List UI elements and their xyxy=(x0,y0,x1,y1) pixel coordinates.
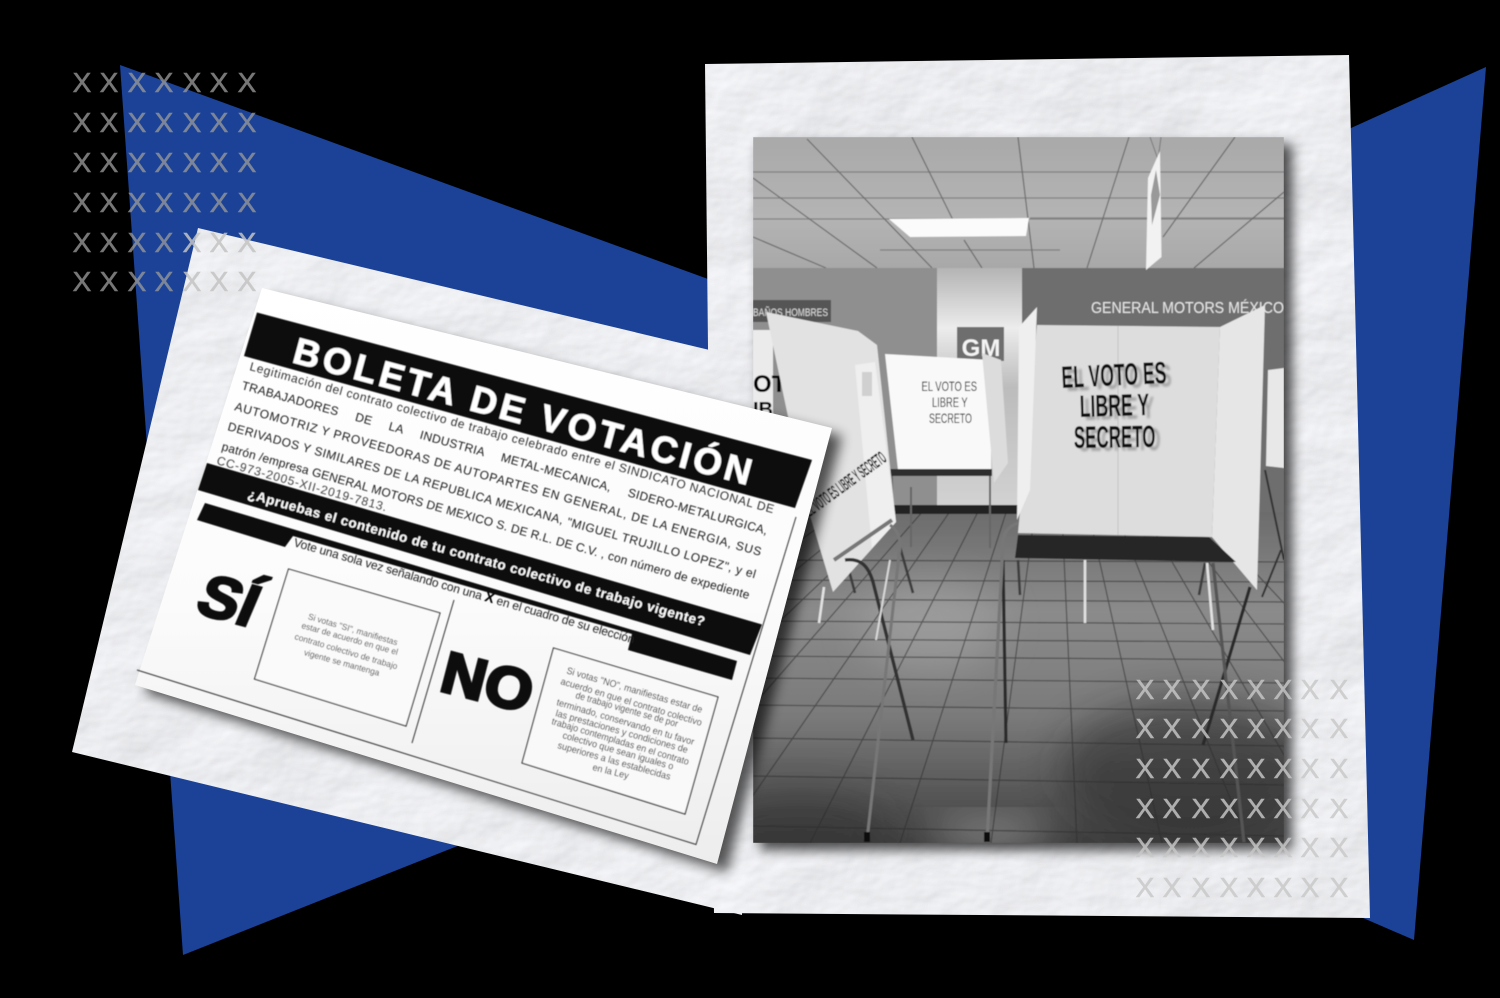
pattern: X grid top left over paper: XXX xyxy=(183,227,257,258)
pattern: X grid top left on dark: XXXXXXX xyxy=(73,67,257,98)
ceiling xyxy=(753,137,1284,269)
ballot instruction bar xyxy=(197,503,737,680)
booth legs: left xyxy=(834,520,913,840)
column with GM logo xyxy=(937,268,1022,508)
ballot frame lines xyxy=(137,517,796,844)
booth text: center: LIBRE Y xyxy=(932,394,968,410)
ballot title: BOLETA DE VOTACIÓN xyxy=(289,329,757,493)
NO label: NO xyxy=(435,640,540,726)
ballot question bar xyxy=(198,463,762,655)
pattern: X grid bottom right: XXXXXXXX xyxy=(1136,713,1349,744)
photo shadow xyxy=(760,144,1292,850)
SÍ explanation: vigente se mantenga xyxy=(303,647,381,678)
ballot legal text: CC-973-2005-XII-2019-7813. xyxy=(215,453,388,514)
booth: center xyxy=(885,353,1008,483)
ballot legal text: patrón /empresa GENERAL MOTORS DE MEXICO S. DE R.L. DE C.V. , con número de expediente xyxy=(220,439,752,602)
sign: baños hombres xyxy=(753,300,831,322)
pattern: X grid top left over paper xyxy=(183,227,257,297)
floor with tiles xyxy=(753,513,1284,843)
pattern: X grid top left over paper: XXX xyxy=(183,266,257,297)
pattern: X grid top left on dark: XXXXXXX xyxy=(73,147,257,178)
booth legs: right xyxy=(864,560,1252,842)
booth legs: background xyxy=(847,470,1205,595)
pattern: X grid bottom right: XXXXXXXX xyxy=(1136,872,1349,903)
pattern: X grid bottom right xyxy=(1136,674,1349,903)
ballot legal text: DERIVADOS Y SIMILARES DE LA REPUBLICA MEXICANA, "MIGUEL TRUJILLO LOPEZ", y el xyxy=(226,419,758,581)
booth text: right large: SECRETO xyxy=(1074,419,1156,455)
ballot legal text: AUTOMOTRIZ Y PROVEEDORAS DE AUTOPARTES EN GENERAL, DE LA ENERGIA, SUS xyxy=(233,399,763,559)
NO explanation: en la Ley xyxy=(591,762,630,782)
photo: polling booths at General Motors xyxy=(753,137,1284,843)
booth: left xyxy=(766,312,896,592)
booth: far left edge xyxy=(753,329,782,414)
blue shape: left xyxy=(120,65,730,955)
wall right xyxy=(1022,268,1284,518)
booth: far right edge xyxy=(1262,368,1284,597)
SÍ explanation: contrato colectivo de trabajo xyxy=(293,631,399,671)
ballot legal text: Legitimación del contrato colectivo de trabajo celebrado entre el SINDICATO NACIONAL DE xyxy=(248,359,776,516)
pattern: X grid top left on dark: XXXX xyxy=(73,227,174,258)
pattern: X grid top left on dark: XXXX xyxy=(73,266,174,297)
ballot legal text: TRABAJADORES DE LA INDUSTRIA METAL-MECANICA, SIDERO-METALURGICA, xyxy=(240,378,769,538)
booth text: center: SECRETO xyxy=(929,410,972,426)
SÍ box xyxy=(254,569,440,726)
SÍ explanation: Si votas "SI", manifiestas xyxy=(307,611,400,648)
paper: left crumpled sheet xyxy=(72,228,760,915)
pattern: X grid top left on dark xyxy=(73,67,257,297)
SÍ explanation xyxy=(293,611,400,678)
ballot title bar xyxy=(244,312,812,508)
blue shape: right xyxy=(1340,67,1486,940)
pattern: X grid top left on dark: XXXXXXX xyxy=(73,187,257,218)
NO explanation: colectivo que sean iguales o xyxy=(561,730,675,773)
booth text: right large: EL VOTO ES xyxy=(1066,358,1172,398)
booth text: right large: LIBRE Y xyxy=(1084,390,1155,427)
NO explanation xyxy=(550,666,704,783)
ballot legal text xyxy=(215,359,776,602)
NO explanation: terminado, conservando en tu favor xyxy=(555,697,696,748)
pattern: X grid top left on dark: XXXXXXX xyxy=(73,107,257,138)
booth: far left edge: OT xyxy=(753,371,787,398)
pattern: X grid bottom right: XXXXXXXX xyxy=(1136,753,1349,784)
ballot drop shadow xyxy=(145,296,842,872)
ballot instruction: Vote una sola vez señalando con una X en el cuadro de su elección xyxy=(292,534,637,646)
booth text: right large: EL VOTO ES xyxy=(1061,355,1167,395)
booth text: center xyxy=(922,378,977,426)
photo: polling booths at General Motors: EL VOTO ES LIBRE Y SECRETO xyxy=(801,448,890,520)
column with GM logo: GM xyxy=(962,335,1000,362)
paper: right crumpled sheet xyxy=(705,55,1370,918)
NO explanation: de trabajo vigente se de por xyxy=(574,690,680,730)
NO explanation: las prestaciones y condiciones de xyxy=(554,708,689,756)
NO explanation: trabajo contempladas en el contrato xyxy=(550,716,690,768)
NO explanation: superiores a las establecidas xyxy=(556,740,672,783)
ballot question: ¿Apruebas el contenido de tu contrato colectivo de trabajo vigente? xyxy=(246,486,707,629)
pattern: X grid bottom right: XXXXXXXX xyxy=(1136,793,1349,824)
wall left xyxy=(753,268,939,518)
ballot paper xyxy=(135,288,832,864)
booth: far left edge: IB xyxy=(753,399,773,421)
NO explanation: acuerdo en que el contrato colectivo xyxy=(559,676,703,729)
booth text: center: EL VOTO ES xyxy=(922,378,977,394)
SÍ label: SÍ xyxy=(188,561,273,640)
sign: baños hombres: BAÑOS HOMBRES xyxy=(753,306,828,319)
pattern: X grid bottom right: XXXXXXXX xyxy=(1136,674,1349,705)
booth: right large panels xyxy=(1015,305,1265,590)
booth text: right large: SECRETO xyxy=(1079,422,1161,458)
pattern: X grid bottom right: XXXXXXXX xyxy=(1136,832,1349,863)
wall lettering: General Motors México: GENERAL MOTORS MÉXICO xyxy=(1091,298,1284,317)
SÍ explanation: estar de acuerdo en que el xyxy=(300,620,399,657)
booth text: right large: LIBRE Y xyxy=(1079,387,1150,424)
NO explanation: Si votas "NO", manifiestas estar de xyxy=(565,666,704,716)
booth text: right large xyxy=(1062,361,1172,452)
NO box xyxy=(522,648,718,814)
hanging sign xyxy=(1146,137,1162,270)
